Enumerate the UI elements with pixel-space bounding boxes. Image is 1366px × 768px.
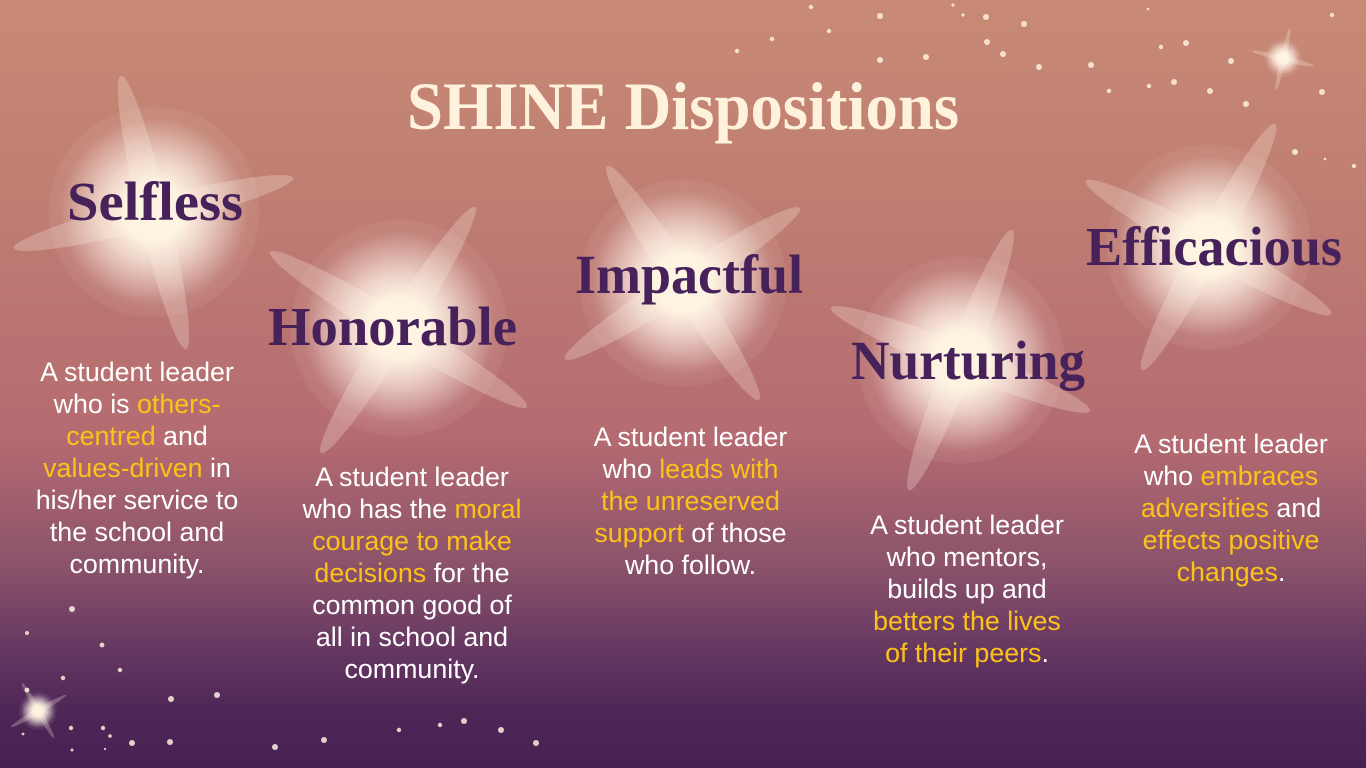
- text block: Selfless description: A student leader: [40, 357, 234, 387]
- text block: Nurturing description: A student leader: [870, 510, 1064, 540]
- text block: Efficacious description: A student leader: [1134, 429, 1328, 459]
- text block: Selfless description: the school and: [50, 517, 224, 547]
- panel: Selfless: [10, 72, 297, 579]
- text block: Selfless description: values-driven in: [43, 453, 231, 483]
- text block: Nurturing description: builds up and: [887, 574, 1047, 604]
- text block: Impactful description: who follow.: [624, 550, 756, 580]
- icon: Nurturing star: [825, 224, 1096, 496]
- icon: small star bottom left: [9, 681, 68, 740]
- text block: Honorable description: all in school and: [316, 622, 508, 652]
- text block: Efficacious description: who embraces: [1143, 461, 1318, 491]
- text block: Honorable description: courage to make: [312, 526, 512, 556]
- text block: Selfless description: who is others-: [53, 389, 220, 419]
- icon: Efficacious star: [1079, 117, 1338, 377]
- text block: Selfless description: community.: [69, 549, 205, 579]
- text block: Honorable description: who has the moral: [302, 494, 521, 524]
- title: SHINE Dispositions: [407, 68, 959, 144]
- icon: Selfless star: [10, 72, 297, 353]
- panel: Efficacious: [1079, 117, 1342, 587]
- text block: Efficacious description: changes.: [1177, 557, 1285, 587]
- text block: Nurturing description: who mentors,: [886, 542, 1047, 572]
- heading: Honorable: Honorable: [268, 296, 517, 357]
- text block: Selfless description: his/her service to: [36, 485, 238, 515]
- text block: Efficacious description: [1134, 429, 1328, 587]
- heading: Efficacious: Efficacious: [1086, 216, 1342, 277]
- panel: Impactful: [557, 158, 808, 580]
- heading: Nurturing: Nurturing: [851, 330, 1085, 391]
- text block: Selfless description: centred and: [66, 421, 208, 451]
- text block: Nurturing description: of their peers.: [885, 638, 1049, 668]
- text block: Honorable description: A student leader: [315, 462, 509, 492]
- text block: Honorable description: decisions for the: [314, 558, 510, 588]
- starry dots: bottom left: [22, 606, 539, 752]
- text block: Honorable description: common good of: [312, 590, 512, 620]
- text block: Impactful description: A student leader: [594, 422, 787, 452]
- text block: Impactful description: [594, 422, 787, 580]
- panel: Honorable: [262, 199, 535, 684]
- heading: Impactful: Impactful: [575, 244, 803, 305]
- text block: Impactful description: the unreserved: [601, 486, 780, 516]
- text block: Impactful description: who leads with: [602, 454, 778, 484]
- text block: Honorable description: [302, 462, 521, 684]
- text block: Nurturing description: [870, 510, 1064, 668]
- text block: Efficacious description: adversities and: [1141, 493, 1321, 523]
- panel: Nurturing: [825, 224, 1096, 668]
- starry dots: top right: [735, 3, 1356, 168]
- text block: Nurturing description: betters the lives: [873, 606, 1061, 636]
- text block: Efficacious description: effects positive: [1143, 525, 1319, 555]
- icon: Honorable star: [262, 199, 535, 461]
- heading: Selfless: Selfless: [67, 171, 243, 232]
- text block: Honorable description: community.: [344, 654, 480, 684]
- text block: Selfless description: [36, 357, 238, 579]
- icon: small star top right: [1251, 27, 1315, 91]
- text block: Impactful description: support of those: [594, 518, 787, 548]
- icon: Impactful star: [557, 158, 808, 408]
